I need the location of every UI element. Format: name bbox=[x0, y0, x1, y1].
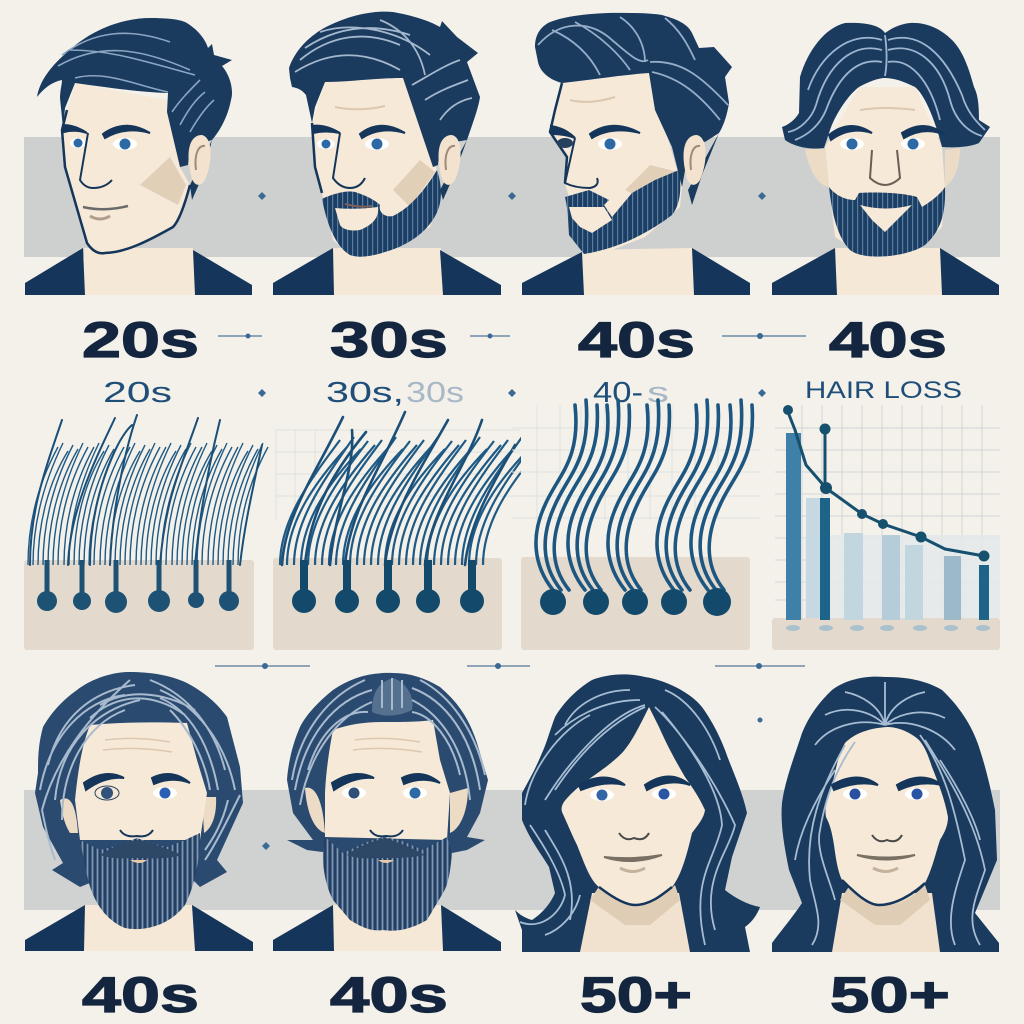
age labels bottom row bbox=[82, 967, 950, 1023]
sub labels row: 40- bbox=[593, 377, 643, 409]
age labels bottom row: 40s bbox=[330, 967, 448, 1023]
age labels row one: 30s bbox=[330, 312, 448, 368]
top gray band bbox=[24, 137, 1000, 257]
age labels row one: 20s bbox=[82, 312, 199, 368]
portrait: 20s man bbox=[25, 18, 252, 295]
portrait: 40s man with medium hair bbox=[772, 23, 999, 295]
sub labels row bbox=[103, 377, 962, 409]
portrait: bearded man 2 bbox=[273, 673, 501, 951]
sub labels row: 20s bbox=[103, 377, 172, 409]
sub labels row: HAIR LOSS bbox=[805, 377, 962, 404]
chart: hair loss bbox=[772, 405, 1000, 650]
age labels bottom row: 50+ bbox=[580, 967, 692, 1023]
bottom gray band bbox=[24, 790, 1000, 910]
hair panel: 30s thicker hair bbox=[273, 412, 543, 650]
portrait: woman 2 bbox=[772, 677, 999, 952]
age labels bottom row: 40s bbox=[82, 967, 199, 1023]
connector markers bbox=[215, 192, 806, 850]
sub labels row: 30s bbox=[406, 377, 464, 409]
portrait: 40s man with quiff bbox=[522, 13, 750, 295]
age labels row one: 40s bbox=[829, 312, 947, 368]
portrait: woman 1 bbox=[515, 674, 760, 952]
age labels bottom row: 50+ bbox=[830, 967, 950, 1023]
age labels row one: 40s bbox=[578, 312, 695, 368]
portrait: bearded man 1 bbox=[25, 672, 253, 951]
sub labels row: s bbox=[647, 377, 669, 409]
hair panel: 20s fine hair bbox=[24, 415, 268, 650]
age labels row one bbox=[82, 312, 947, 368]
sub labels row: 30s, bbox=[326, 377, 404, 409]
hair panel: 40s thick hair bbox=[512, 400, 760, 650]
portrait: 30s man bbox=[273, 12, 501, 295]
